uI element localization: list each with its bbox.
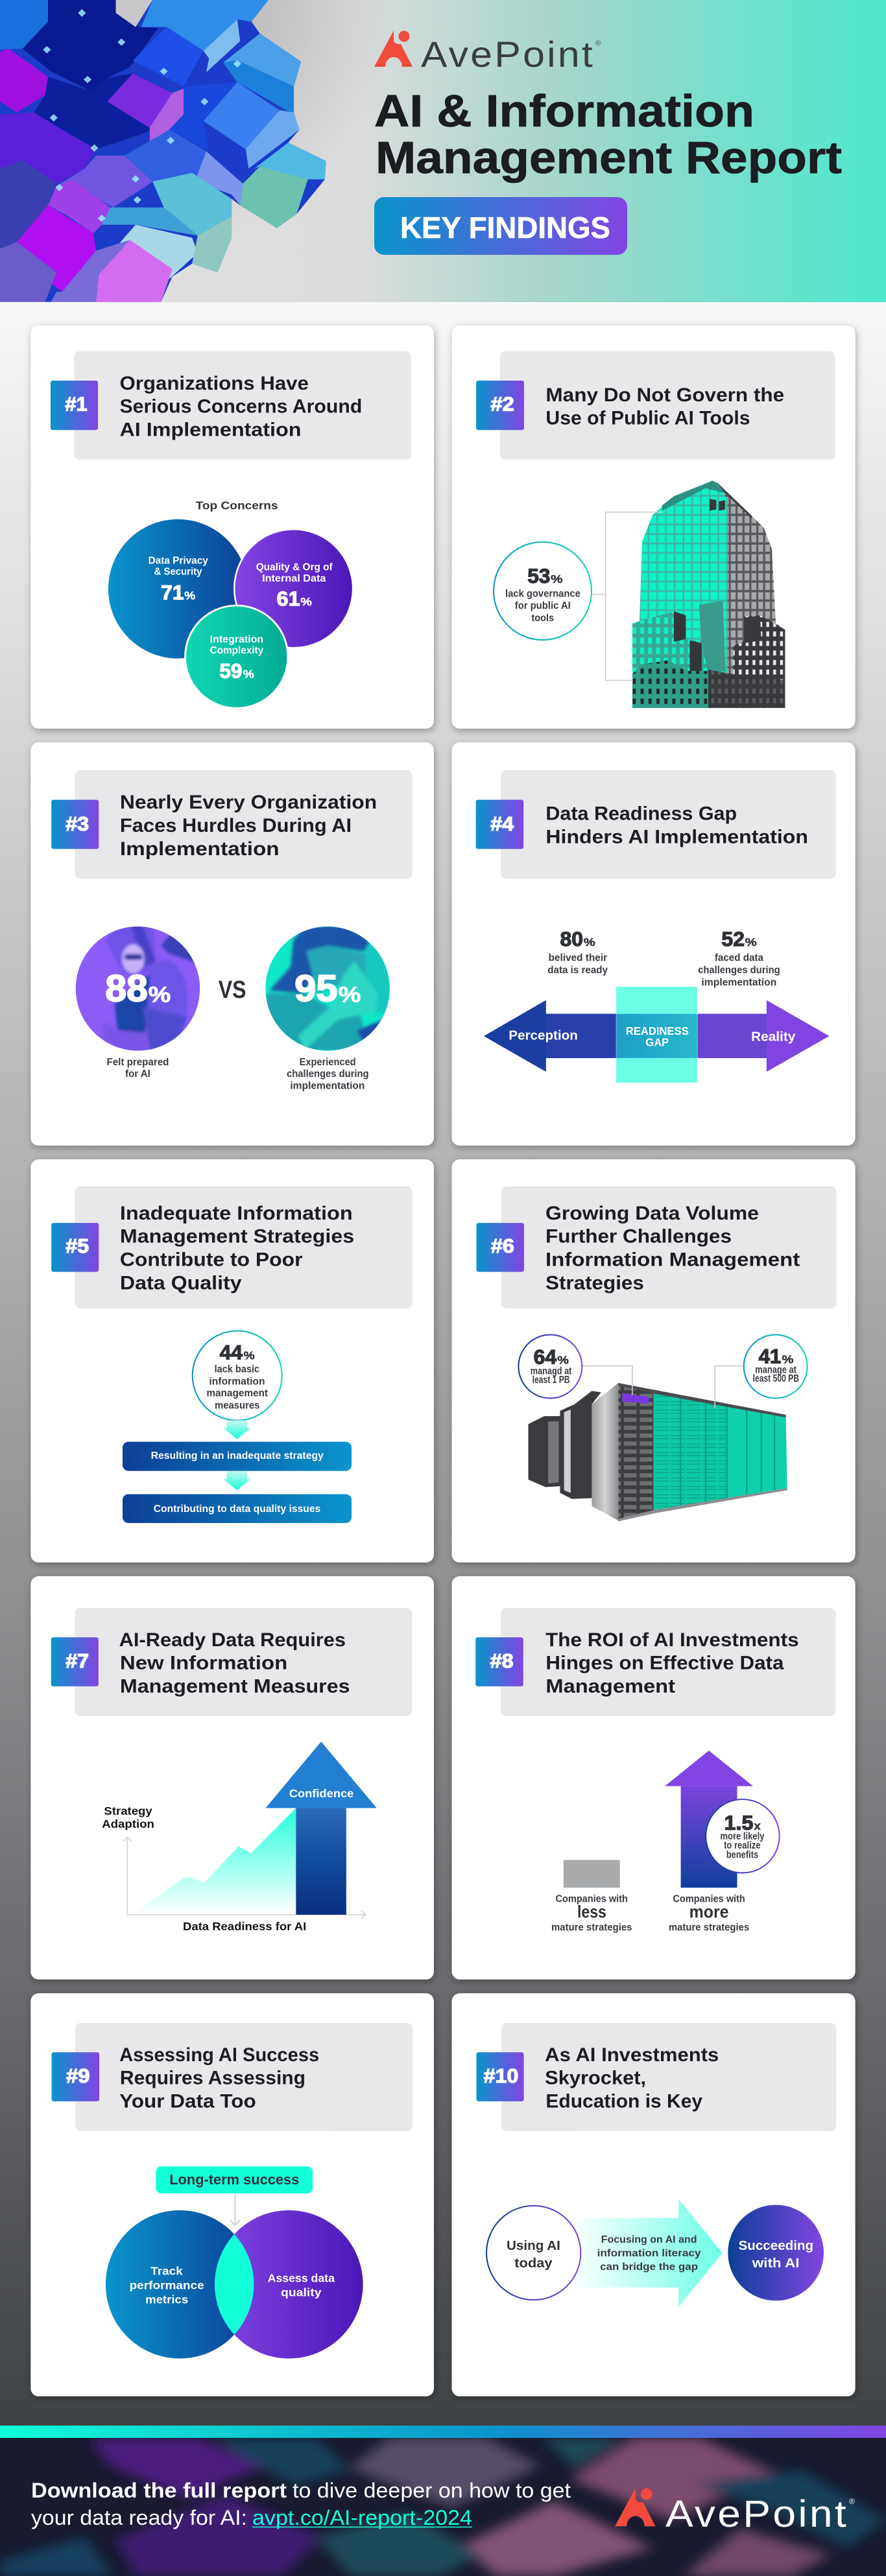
call to action text: to dive deeper on how to get — [293, 2479, 571, 2502]
heading 5: Contribute to Poor — [120, 1249, 303, 1271]
stat: 52% reality — [698, 928, 780, 988]
panel: finding 3 — [30, 742, 434, 1146]
panel: finding 1 — [30, 325, 434, 729]
heading 5 — [75, 1187, 413, 1308]
logo: AvePoint — [374, 30, 601, 75]
stat: 52% reality: implementation — [701, 977, 776, 988]
heading 6: Strategies — [545, 1273, 644, 1294]
bar: less mature strategies: Companies with — [556, 1893, 628, 1904]
panel: finding 4 — [452, 742, 856, 1146]
node: succeeding with AI: with AI — [752, 2256, 799, 2271]
heading 5: Management Strategies — [120, 1226, 354, 1247]
gradient divider strip — [0, 2426, 886, 2438]
title: AI & Information — [374, 86, 754, 136]
heading 8 — [501, 1608, 835, 1716]
badge #5: #5 — [66, 1236, 89, 1257]
chart: top concerns bubbles: & Security — [154, 567, 202, 578]
stat: 52% reality: 52 — [721, 928, 745, 951]
heading 2: Use of Public AI Tools — [545, 408, 750, 429]
badge #9 — [52, 2052, 99, 2101]
image: abstract glass cubes — [0, 0, 326, 302]
callout: 64%: 64 — [534, 1346, 557, 1369]
badge #7: #7 — [66, 1651, 89, 1672]
heading 8: Hinges on Effective Data — [545, 1653, 784, 1674]
stat: 95% challenges: Experienced — [300, 1057, 356, 1068]
stat: 88% prepared — [76, 925, 200, 1080]
callout: 64% — [518, 1335, 582, 1399]
chart: top concerns bubbles: 71 — [161, 581, 184, 604]
call to action text: avpt.co/AI-report-2024 — [252, 2506, 472, 2529]
stat: 88% prepared: 88 — [105, 968, 148, 1010]
chart: strategy adoption vs readiness: Data Readiness for AI — [183, 1920, 306, 1933]
panel: finding 10 — [452, 1993, 856, 2396]
heading 2 — [500, 351, 835, 460]
label: VS: VS — [219, 976, 246, 1003]
heading 10 — [501, 2023, 836, 2131]
callout: 44%: information — [209, 1377, 265, 1388]
chart: top concerns bubbles: 59 — [219, 660, 242, 683]
badge #1: #1 — [65, 394, 88, 415]
panel: finding 9 — [30, 1993, 434, 2396]
callout: 44%: management — [206, 1388, 268, 1399]
stat: 52% reality: faced data — [715, 952, 763, 963]
heading 9: Requires Assessing — [120, 2068, 305, 2089]
chart: strategy adoption vs readiness: Confidence — [289, 1787, 353, 1800]
badge #6 — [476, 1223, 524, 1272]
badge #7 — [51, 1637, 99, 1686]
badge #10 — [476, 2052, 524, 2101]
callout: 44%: measures — [215, 1400, 259, 1412]
logo: AvePoint white: ® — [849, 2497, 855, 2506]
arrow: more mature strategies: Companies with — [673, 1893, 745, 1904]
arrow: bridge the gap: can bridge the gap — [600, 2262, 698, 2273]
badge #1 — [51, 381, 98, 430]
diagram: perception vs reality arrow: Perception — [509, 1029, 578, 1043]
logo: AvePoint: ® — [595, 40, 601, 47]
button: key findings — [374, 197, 627, 255]
bar: less mature strategies — [551, 1860, 632, 1933]
stat: 80% perception: data is ready — [547, 965, 608, 976]
stat: 95% challenges: challenges during — [287, 1069, 369, 1080]
call to action text — [31, 2479, 571, 2529]
panel: finding 5 — [30, 1159, 434, 1563]
heading 3: Nearly Every Organization — [120, 792, 377, 813]
panel: finding 7 — [30, 1576, 434, 1979]
callout: 53%: % — [551, 573, 563, 585]
diagram: venn of metrics and data quality: Track — [150, 2265, 183, 2278]
heading 7 — [75, 1608, 412, 1716]
heading 10: Education is Key — [545, 2091, 702, 2112]
footer — [0, 2438, 886, 2576]
diagram: perception vs reality arrow — [484, 987, 830, 1083]
heading 3 — [75, 770, 413, 879]
heading 1: Organizations Have — [119, 373, 309, 394]
callout: 44%: 44 — [220, 1341, 243, 1364]
heading 3: Implementation — [120, 838, 280, 860]
bar: less mature strategies: less — [577, 1902, 606, 1922]
node: using AI today: today — [514, 2256, 553, 2271]
stat: 95% challenges: implementation — [290, 1081, 365, 1092]
callout: 1.5x: x — [754, 1819, 761, 1832]
arrow: more mature strategies — [665, 1751, 753, 1933]
chart: top concerns bubbles: Quality & Org of — [256, 562, 333, 573]
chart: top concerns bubbles: % — [300, 595, 312, 608]
diagram: venn of metrics and data quality: metrics — [145, 2293, 188, 2306]
stat: 80% perception: % — [584, 936, 595, 949]
callout: 1.5x: more likely — [720, 1831, 765, 1842]
node: succeeding with AI: Succeeding — [739, 2239, 813, 2253]
arrow: down to strategy — [223, 1421, 251, 1439]
chart: top concerns bubbles: 61 — [277, 587, 300, 610]
badge #10: #10 — [484, 2066, 518, 2087]
stat: 80% perception — [547, 928, 608, 976]
heading 1: AI Implementation — [119, 419, 301, 441]
chart: top concerns bubbles: Internal Data — [262, 573, 326, 584]
arrow: bridge the gap: information literacy — [597, 2248, 701, 2259]
badge #4 — [476, 799, 523, 849]
title — [374, 86, 842, 183]
heading 8: Management — [545, 1676, 675, 1697]
chart: strategy adoption vs readiness: Adaption — [102, 1817, 154, 1830]
callout: 53%: 53 — [527, 565, 550, 587]
chart: top concerns bubbles: % — [184, 589, 195, 602]
heading 3: Faces Hurdles During AI — [120, 815, 352, 836]
arrow: more mature strategies: more — [689, 1902, 728, 1922]
arrow: down to data quality — [223, 1471, 251, 1490]
chart: top concerns bubbles: Integration — [210, 634, 263, 645]
heading 9 — [75, 2023, 413, 2131]
heading 6: Information Management — [545, 1249, 800, 1271]
heading 1 — [74, 351, 411, 460]
panel: finding 8 — [452, 1576, 856, 1979]
callout: 1.5x: benefits — [726, 1850, 758, 1861]
callout: 64%: least 1 PB — [533, 1375, 570, 1386]
badge #2: #2 — [491, 394, 514, 415]
button: key findings: KEY FINDINGS — [400, 211, 610, 244]
callout: 53%: for public AI — [515, 600, 571, 611]
callout: 1.5x — [706, 1799, 780, 1873]
stat: 80% perception: 80 — [560, 928, 583, 951]
heading 6 — [501, 1187, 837, 1308]
chart: top concerns bubbles: % — [243, 668, 254, 681]
callout: 41%: % — [782, 1353, 794, 1365]
badge #2 — [476, 381, 524, 430]
chart: top concerns bubbles: Top Concerns — [196, 499, 278, 512]
panel: finding 2 — [452, 325, 856, 729]
stat: 52% reality: challenges during — [698, 965, 780, 976]
heading 4: Data Readiness Gap — [545, 803, 737, 824]
badge #4: #4 — [490, 814, 514, 835]
heading 9: Your Data Too — [119, 2091, 256, 2112]
heading 7: Management Measures — [120, 1676, 350, 1697]
connector bracket — [593, 512, 662, 680]
diagram: venn of metrics and data quality: performance — [130, 2279, 204, 2292]
title: Management Report — [376, 132, 842, 183]
illustration: office tower — [632, 480, 785, 708]
diagram: perception vs reality arrow: GAP — [645, 1035, 669, 1048]
stat: 80% perception: belived their — [549, 952, 607, 963]
heading 7: New Information — [120, 1653, 287, 1674]
callout: 53%: lack governance — [505, 588, 581, 599]
callout: 41% — [744, 1335, 808, 1399]
badge #3 — [51, 799, 99, 849]
connector lines — [582, 1366, 743, 1408]
diagram: venn of metrics and data quality: Assess data — [268, 2272, 335, 2285]
badge #5 — [51, 1223, 99, 1272]
logo: AvePoint white: AvePoint — [665, 2493, 848, 2535]
heading 5: Data Quality — [120, 1273, 242, 1294]
heading 4 — [501, 770, 836, 879]
stat: 95% challenges: 95 — [294, 968, 337, 1010]
chart: top concerns bubbles — [108, 499, 353, 708]
callout: 53% — [494, 542, 592, 640]
stat: 88% prepared: for AI — [125, 1069, 150, 1080]
step: data quality issues — [123, 1494, 352, 1523]
heading 4: Hinders AI Implementation — [545, 826, 808, 847]
logo: AvePoint white — [615, 2488, 855, 2535]
heading 8: The ROI of AI Investments — [545, 1629, 799, 1651]
heading 10: Skyrocket, — [545, 2068, 646, 2089]
heading 6: Further Challenges — [545, 1226, 732, 1247]
heading 5: Inadequate Information — [120, 1203, 353, 1224]
diagram: perception vs reality arrow: READINESS — [626, 1024, 689, 1037]
stat: 88% prepared: % — [149, 982, 171, 1007]
bar: less mature strategies: mature strategies — [551, 1922, 632, 1933]
arrow: down to overlap — [230, 2193, 240, 2225]
call to action text: Download the full report — [31, 2479, 287, 2502]
step: inadequate strategy — [123, 1442, 352, 1471]
heading 6: Growing Data Volume — [545, 1203, 759, 1224]
badge #8 — [475, 1637, 523, 1686]
callout: 41%: 41 — [759, 1345, 781, 1367]
arrow: more mature strategies: mature strategies — [669, 1922, 749, 1933]
stat: 95% challenges — [265, 925, 390, 1092]
node: using AI today — [486, 2206, 581, 2300]
chart: strategy adoption vs readiness: Strategy — [104, 1804, 152, 1817]
arrow: bridge the gap — [569, 2199, 723, 2307]
chart: strategy adoption vs readiness — [102, 1742, 377, 1933]
panel: finding 6 — [452, 1159, 856, 1563]
call to action text: your data ready for AI: — [31, 2506, 247, 2529]
callout: 44%: % — [244, 1349, 255, 1362]
heading 9: Assessing AI Success — [119, 2044, 319, 2066]
chart: top concerns bubbles: Complexity — [210, 645, 263, 656]
callout: 44% — [193, 1331, 282, 1421]
badge #6: #6 — [491, 1236, 514, 1257]
stat: 88% prepared: Felt prepared — [106, 1057, 169, 1068]
stat: 95% challenges: % — [339, 982, 361, 1007]
diagram: perception vs reality arrow: Reality — [751, 1030, 796, 1045]
callout: 41%: least 500 PB — [753, 1373, 799, 1384]
callout: 64%: managd at — [531, 1366, 571, 1377]
callout: 1.5x: to realize — [724, 1840, 761, 1851]
header banner — [0, 0, 886, 302]
badge #9: #9 — [66, 2066, 90, 2087]
illustration: server racks — [528, 1383, 787, 1522]
heading 10: As AI Investments — [545, 2044, 719, 2066]
callout: 41%: manage at — [755, 1365, 796, 1376]
heading 1: Serious Concerns Around — [119, 396, 362, 418]
diagram: venn of metrics and data quality — [106, 2210, 363, 2359]
stat: 52% reality: % — [745, 936, 757, 949]
heading 2: Many Do Not Govern the — [545, 384, 784, 406]
node: using AI today: Using AI — [507, 2239, 560, 2253]
callout: 44%: lack basic — [215, 1364, 259, 1375]
step: inadequate strategy: Resulting in an inadequate strategy — [151, 1450, 324, 1461]
diagram: venn of metrics and data quality: quality — [281, 2286, 322, 2299]
logo: AvePoint: AvePoint — [421, 34, 595, 75]
arrow: bridge the gap: Focusing on AI and — [601, 2234, 697, 2245]
badge #8: #8 — [490, 1651, 514, 1672]
label: long-term success: Long-term success — [169, 2171, 299, 2188]
callout: 53%: tools — [531, 613, 554, 624]
callout: 64%: % — [557, 1354, 569, 1367]
callout: 1.5x: 1.5 — [724, 1812, 753, 1834]
heading 7: AI-Ready Data Requires — [119, 1629, 346, 1651]
chart: top concerns bubbles: Data Privacy — [149, 555, 208, 566]
step: data quality issues: Contributing to data quality issues — [154, 1504, 320, 1515]
badge #3: #3 — [66, 814, 89, 835]
node: succeeding with AI — [728, 2205, 824, 2300]
label: long-term success — [156, 2166, 313, 2193]
